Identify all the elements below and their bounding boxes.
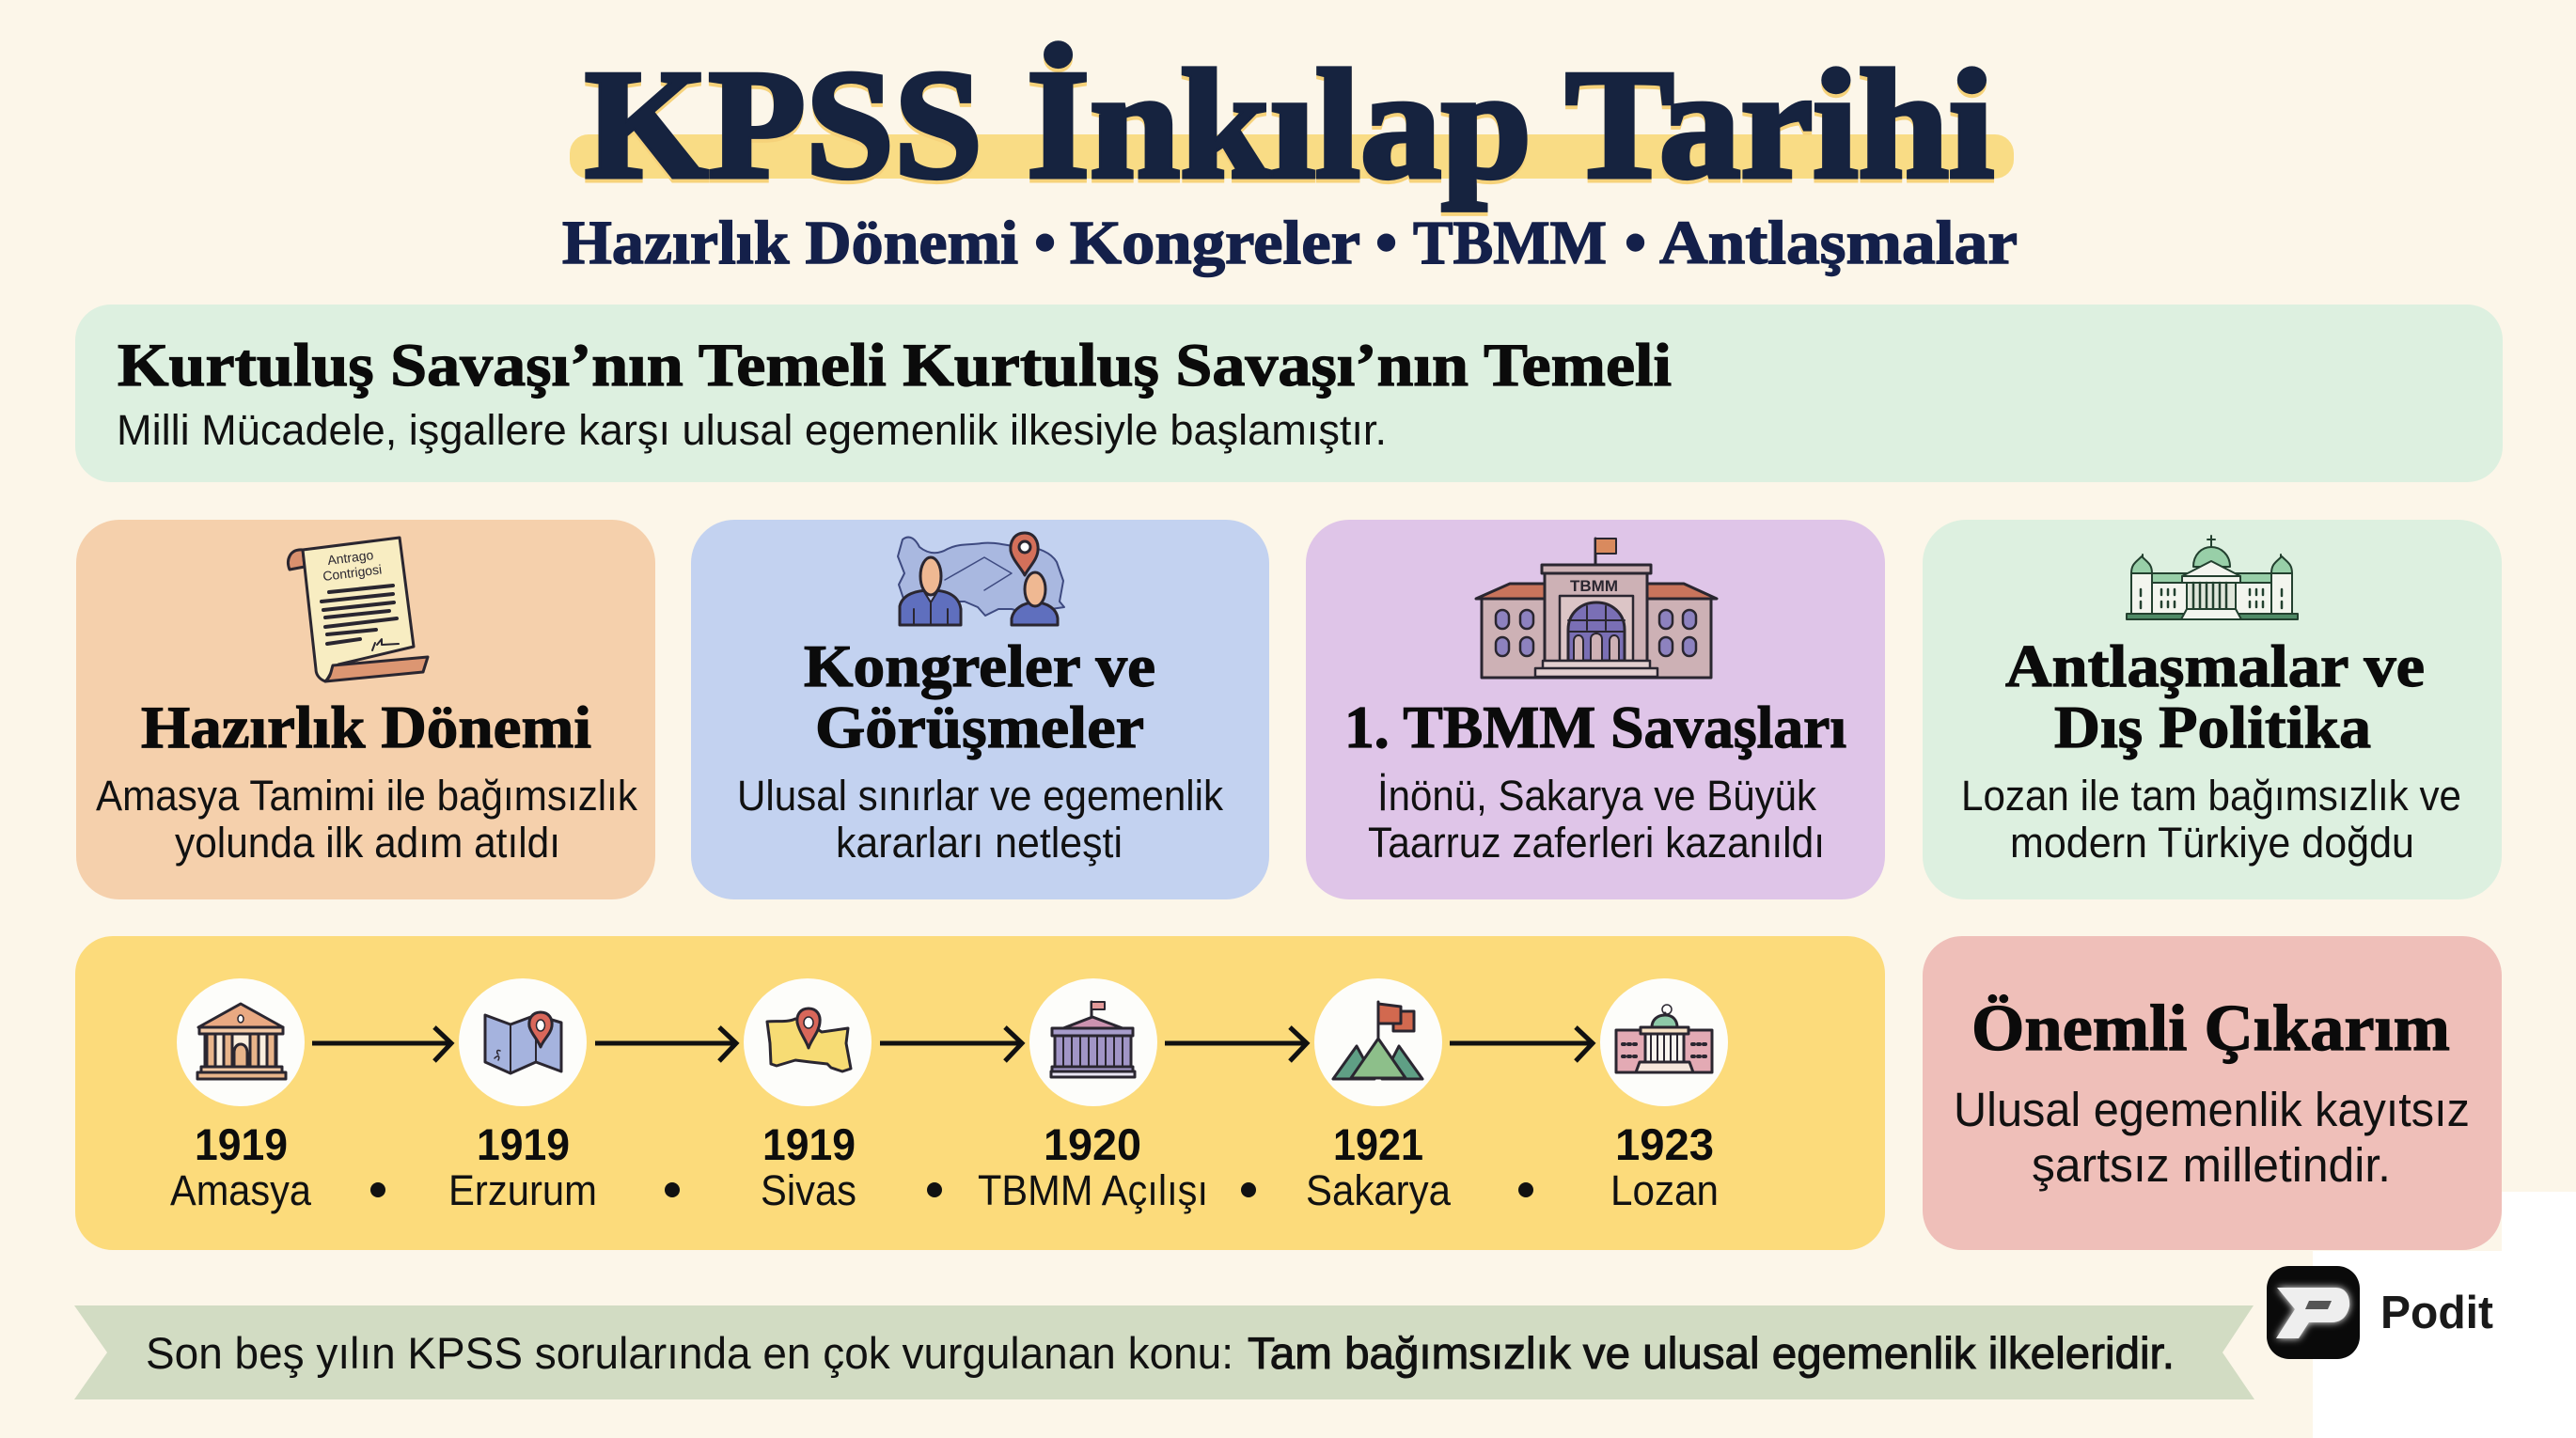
arrow xyxy=(595,1027,736,1061)
card heading xyxy=(804,633,1155,760)
banner text: Son beş yılın KPSS sorularında en çok vurgulanan konu: xyxy=(146,1328,1233,1378)
arrow xyxy=(312,1027,451,1061)
year: 1919 xyxy=(762,1119,856,1169)
year: 1920 xyxy=(1044,1119,1141,1169)
icon: mountains with flag xyxy=(1333,1002,1422,1079)
icon: scroll document xyxy=(289,538,428,681)
icon: parliament with flag xyxy=(1051,1002,1135,1077)
panel: Hazırlık Dönemi xyxy=(76,520,655,899)
arrow xyxy=(880,1027,1022,1061)
year: 1919 xyxy=(195,1119,288,1169)
card heading: 1. TBMM Savaşları xyxy=(1344,694,1846,760)
subtitle: • xyxy=(1375,209,1397,277)
card description xyxy=(1961,772,2461,867)
timeline step: 1919 Erzurum xyxy=(448,978,597,1214)
title: Tarihi xyxy=(1565,38,1994,211)
takeaway heading: Önemli Çıkarım xyxy=(1971,993,2450,1065)
panel: Antlaşmalar ve Dış Politika xyxy=(1923,520,2502,899)
subtitle: • xyxy=(1625,209,1646,277)
panel: Kongreler ve Görüşmeler xyxy=(691,520,1269,899)
year: 1919 xyxy=(477,1119,570,1169)
arrow xyxy=(1165,1027,1307,1061)
banner text xyxy=(146,1328,2175,1378)
card description: Amasya Tamimi ile bağımsızlık xyxy=(96,772,637,820)
title xyxy=(570,38,2014,211)
subtitle: Hazırlık Dönemi xyxy=(562,209,1018,277)
separator dots xyxy=(370,1182,1533,1197)
arrow xyxy=(1450,1027,1593,1061)
icon: P mark xyxy=(2267,1266,2360,1359)
takeaway text: Ulusal egemenlik kayıtsız xyxy=(1954,1083,2470,1136)
panel: 1. TBMM Savaşları xyxy=(1306,520,1885,899)
icon: classical building xyxy=(197,1004,286,1079)
place: Sakarya xyxy=(1306,1166,1452,1214)
icon: folded map with pin xyxy=(485,1012,561,1073)
subtitle: TBMM xyxy=(1413,209,1607,277)
place: Lozan xyxy=(1610,1166,1719,1214)
icon: map with delegates and pin xyxy=(898,533,1064,625)
card description: modern Türkiye doğdu xyxy=(2010,819,2414,867)
panel description: Milli Mücadele, işgallere karşı ulusal egemenlik ilkesiyle başlamıştır. xyxy=(117,406,1387,454)
banner ribbon xyxy=(74,1305,2254,1399)
card description: yolunda ilk adım atıldı xyxy=(175,819,560,867)
title: İnkılap xyxy=(1027,38,1531,211)
timeline step: 1919 Sivas xyxy=(744,978,872,1214)
card description xyxy=(737,772,1223,867)
card heading: Kongreler ve xyxy=(804,633,1155,699)
card description: Lozan ile tam bağımsızlık ve xyxy=(1961,772,2461,820)
subtitle: • xyxy=(1034,209,1056,277)
icon: TBMM building xyxy=(1476,539,1717,678)
icon: scroll document: Antrago xyxy=(326,547,374,568)
icon: scroll document: Contrigosi xyxy=(322,561,383,584)
card description xyxy=(1368,772,1825,867)
card description: Ulusal sınırlar ve egemenlik xyxy=(737,772,1223,820)
year: 1921 xyxy=(1333,1119,1423,1169)
timeline step: 1923 Lozan xyxy=(1600,978,1728,1214)
icon: region map with pin xyxy=(767,1008,851,1071)
card heading: Dış Politika xyxy=(2054,694,2371,760)
icon: TBMM building: TBMM xyxy=(1570,577,1618,595)
panel: Kurtuluş Savaşı'nın Temeli xyxy=(75,305,2503,482)
banner text: Tam bağımsızlık ve ulusal egemenlik ilkeleridir. xyxy=(1248,1328,2175,1378)
logo: Podit xyxy=(2267,1266,2493,1359)
place: Erzurum xyxy=(448,1166,597,1214)
icon: Lozan palace xyxy=(1616,1005,1712,1072)
card description xyxy=(96,772,637,867)
panel: Önemli Çıkarım xyxy=(1923,936,2502,1250)
subtitle: Kongreler xyxy=(1070,209,1360,277)
brand name: Podit xyxy=(2380,1288,2493,1338)
card description: Taarruz zaferleri kazanıldı xyxy=(1368,819,1825,867)
card heading: Hazırlık Dönemi xyxy=(141,694,591,760)
subtitle xyxy=(562,209,2018,277)
title: KPSS xyxy=(585,38,982,211)
place: Amasya xyxy=(170,1166,312,1214)
card description: kararları netleşti xyxy=(836,819,1123,867)
subtitle: Antlaşmalar xyxy=(1659,209,2018,277)
card heading: Görüşmeler xyxy=(815,694,1144,760)
panel heading: Kurtuluş Savaşı’nın Temeli Kurtuluş Savaşı’nın Temeli xyxy=(118,332,1672,399)
takeaway text xyxy=(1954,1083,2470,1192)
place: TBMM Açılışı xyxy=(978,1166,1208,1214)
icon: parliament palace xyxy=(2127,536,2298,619)
panel: timeline xyxy=(75,936,1885,1250)
place: Sivas xyxy=(761,1166,856,1214)
takeaway text: şartsız milletindir. xyxy=(2032,1138,2391,1192)
timeline step: 1921 Sakarya xyxy=(1306,978,1452,1214)
timeline step: 1919 Amasya xyxy=(170,978,312,1214)
timeline step: 1920 TBMM Açılışı xyxy=(978,978,1208,1214)
year: 1923 xyxy=(1615,1119,1714,1169)
card description: İnönü, Sakarya ve Büyük xyxy=(1377,772,1816,820)
card heading: Antlaşmalar ve xyxy=(2005,633,2425,699)
card heading xyxy=(2005,633,2425,760)
